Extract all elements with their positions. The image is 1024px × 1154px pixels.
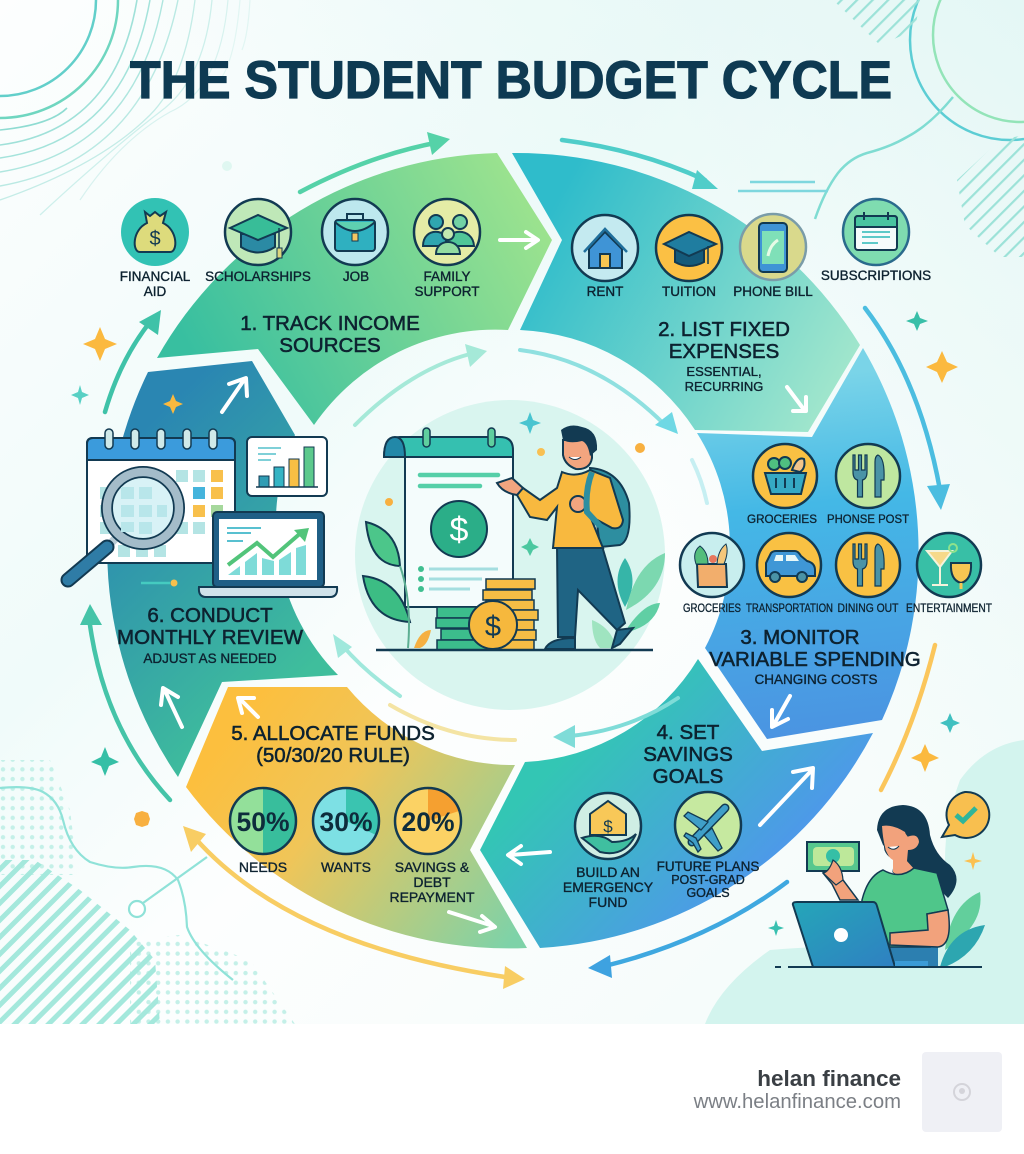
segment 4: set savings goals	[480, 659, 873, 948]
heading: step 5: 5. ALLOCATE FUNDS	[231, 722, 435, 745]
center ground line	[376, 649, 653, 651]
illustration: calendar and magnifier	[68, 429, 235, 580]
footer brand text: www.helanfinance.com	[693, 1091, 901, 1113]
icon: fork and knife	[836, 444, 900, 508]
segment 5: allocate funds	[186, 687, 527, 948]
savings labels: FUTURE PLANS	[657, 859, 759, 874]
heading: step 1: SOURCES	[279, 334, 381, 357]
illustration: plants left	[363, 522, 431, 648]
allocation labels: SAVINGS &	[395, 859, 470, 875]
segment 4 shape	[480, 659, 873, 948]
arrow: white step 3	[772, 696, 790, 727]
inner ring arrows	[333, 344, 707, 748]
icon: subscriptions calendar	[843, 199, 909, 265]
savings labels	[563, 859, 759, 910]
allocation labels	[239, 859, 475, 905]
check mark	[956, 808, 976, 821]
icon: emergency fund	[575, 793, 641, 859]
smile	[888, 846, 899, 849]
heading: step 4	[643, 721, 733, 788]
donut: 50 percent	[230, 788, 296, 854]
illustration: laptop with rising chart	[199, 512, 337, 597]
torso	[860, 868, 948, 947]
laptop	[793, 902, 895, 967]
illustration: right plants	[592, 553, 665, 648]
icon: rent house	[572, 215, 638, 281]
allocation labels: WANTS	[321, 859, 371, 875]
footer logo box	[922, 1052, 1002, 1132]
income labels: SUPPORT	[414, 284, 480, 299]
donut: 30 percent	[313, 788, 379, 854]
illustration: student with backpack	[497, 426, 633, 649]
sweater	[517, 470, 623, 548]
heading: step 6: ADJUST AS NEEDED	[143, 651, 277, 666]
face	[882, 825, 919, 876]
arrow: white step 2	[787, 387, 806, 411]
icon: job briefcase	[322, 199, 388, 265]
income labels: FINANCIAL	[120, 269, 191, 284]
icon: future plans airplane	[675, 792, 741, 858]
allocation labels: DEBT	[413, 874, 451, 890]
savings labels: BUILD AN	[576, 864, 640, 880]
leaf	[945, 892, 981, 950]
hair	[561, 426, 597, 456]
heading: step 2: ESSENTIAL,	[686, 364, 762, 379]
jeans	[890, 945, 938, 967]
icon: scholarships cap	[225, 199, 291, 265]
fixed expense labels: RENT	[587, 284, 623, 299]
title: THE STUDENT BUDGET CYCLE	[130, 51, 892, 110]
arrows: white step 6	[161, 378, 247, 727]
fixed expense labels: TUITION	[662, 284, 716, 299]
icon: groceries basket	[753, 444, 817, 508]
slider accent	[141, 580, 178, 586]
heading: step 5	[231, 722, 435, 767]
variable spending labels: DINING OUT	[838, 601, 899, 615]
footer brand text	[693, 1066, 901, 1113]
donut: 30 percent: 30%	[320, 807, 372, 837]
footer	[0, 1024, 1024, 1154]
arrows: white step 5	[238, 698, 495, 932]
segment 1 shape	[157, 153, 552, 425]
heading: step 2	[658, 318, 790, 394]
outer cycle arrows	[80, 132, 965, 989]
icon: grocery bag	[680, 533, 744, 597]
heading: step 3: VARIABLE SPENDING	[709, 648, 921, 671]
segment 5 shape	[186, 687, 527, 948]
arm	[823, 860, 858, 900]
donut: 50 percent: 50%	[236, 807, 290, 837]
illustration: bar chart card	[247, 437, 327, 496]
heading: step 6	[117, 604, 304, 666]
variable spending labels: TRANSPORTATION	[746, 601, 833, 615]
cash	[807, 842, 859, 871]
allocation labels: NEEDS	[239, 859, 287, 875]
forearm	[890, 910, 949, 947]
strap	[587, 472, 600, 526]
segment 3: monitor variable spending	[680, 348, 993, 739]
sparkle: gold on segment 6	[163, 394, 183, 414]
icon: emergency fund: $	[603, 817, 613, 836]
donut: 20 percent: 20%	[402, 807, 454, 837]
illustration: coin stacks: $	[485, 611, 501, 643]
legs	[557, 546, 625, 637]
illustration: budget document: $	[450, 511, 469, 549]
icon: financial aid money bag	[121, 198, 189, 266]
variable spending labels: GROCERIES	[683, 601, 741, 615]
hand right	[570, 496, 586, 512]
heading: step 2: 2. LIST FIXED	[658, 318, 790, 341]
income labels: SCHOLARSHIPS	[205, 269, 311, 284]
donut: 20 percent	[395, 788, 461, 854]
icon: transportation car	[757, 533, 821, 597]
savings labels: POST-GRAD	[671, 873, 745, 887]
hand left	[497, 478, 523, 495]
fixed expense labels: PHONE BILL	[733, 284, 813, 299]
heading: step 4: GOALS	[653, 765, 723, 788]
icon: tuition cap	[656, 215, 722, 281]
smile	[569, 457, 581, 460]
segment 3 shape	[697, 348, 919, 739]
savings labels: EMERGENCY	[563, 879, 654, 895]
heading: step 3: CHANGING COSTS	[754, 672, 878, 687]
heading: step 4: SAVINGS	[643, 743, 733, 766]
variable spending labels	[683, 512, 993, 615]
arrows: white step 4	[508, 768, 813, 864]
income labels: FAMILY	[423, 269, 471, 284]
icon: dining out	[836, 533, 900, 597]
income labels	[120, 269, 480, 299]
backpack	[590, 468, 630, 547]
segment 2: list fixed expenses	[512, 153, 931, 432]
allocation labels: REPAYMENT	[389, 889, 475, 905]
center: white ring interior	[355, 400, 665, 710]
head fill	[882, 826, 919, 875]
woman ground line	[775, 966, 982, 968]
segment 6: conduct monthly review	[68, 361, 338, 777]
illustration: budget document	[384, 428, 513, 607]
income labels: AID	[144, 284, 166, 299]
income labels: JOB	[343, 269, 369, 284]
heading: step 4: 4. SET	[657, 721, 720, 744]
footer brand text: helan finance	[757, 1066, 901, 1091]
heading: step 2: EXPENSES	[669, 340, 779, 363]
segment 1: track income sources	[120, 153, 552, 425]
arrow: white step 1	[500, 232, 538, 248]
sparkles	[71, 311, 982, 936]
icon: financial aid money bag: $	[149, 228, 161, 250]
left shoe	[545, 638, 575, 649]
heading: step 5: (50/30/20 RULE)	[256, 744, 410, 767]
leaf 2	[940, 925, 985, 967]
variable spending labels: GROCERIES	[747, 512, 817, 526]
heading: step 6: MONTHLY REVIEW	[117, 626, 304, 649]
segment 2 shape	[512, 153, 860, 432]
heading: step 3: 3. MONITOR	[740, 626, 860, 649]
illustration: woman with laptop and cash	[793, 792, 989, 968]
heading: step 6: 6. CONDUCT	[147, 604, 273, 627]
savings labels: FUND	[589, 894, 627, 910]
fixed expense labels: SUBSCRIPTIONS	[821, 268, 931, 283]
variable spending labels: ENTERTAINMENT	[906, 601, 993, 615]
heading: step 1	[240, 312, 420, 357]
fixed expense labels	[587, 268, 931, 299]
segment 6 shape	[107, 361, 338, 777]
heading: step 1: 1. TRACK INCOME	[240, 312, 420, 335]
illustration: coin stacks	[436, 579, 538, 650]
heading: step 3	[709, 626, 921, 687]
savings labels: GOALS	[686, 886, 730, 900]
variable spending labels: PHONSE POST	[827, 512, 910, 526]
icon: entertainment	[917, 533, 981, 597]
icon: phone bill	[740, 214, 806, 280]
head	[563, 440, 592, 469]
icon: family support	[414, 199, 480, 265]
hand over cash	[823, 860, 843, 885]
right shoe	[612, 628, 633, 648]
chat bubble	[942, 792, 989, 838]
heading: step 2: RECURRING	[685, 379, 763, 394]
hair	[877, 805, 957, 898]
